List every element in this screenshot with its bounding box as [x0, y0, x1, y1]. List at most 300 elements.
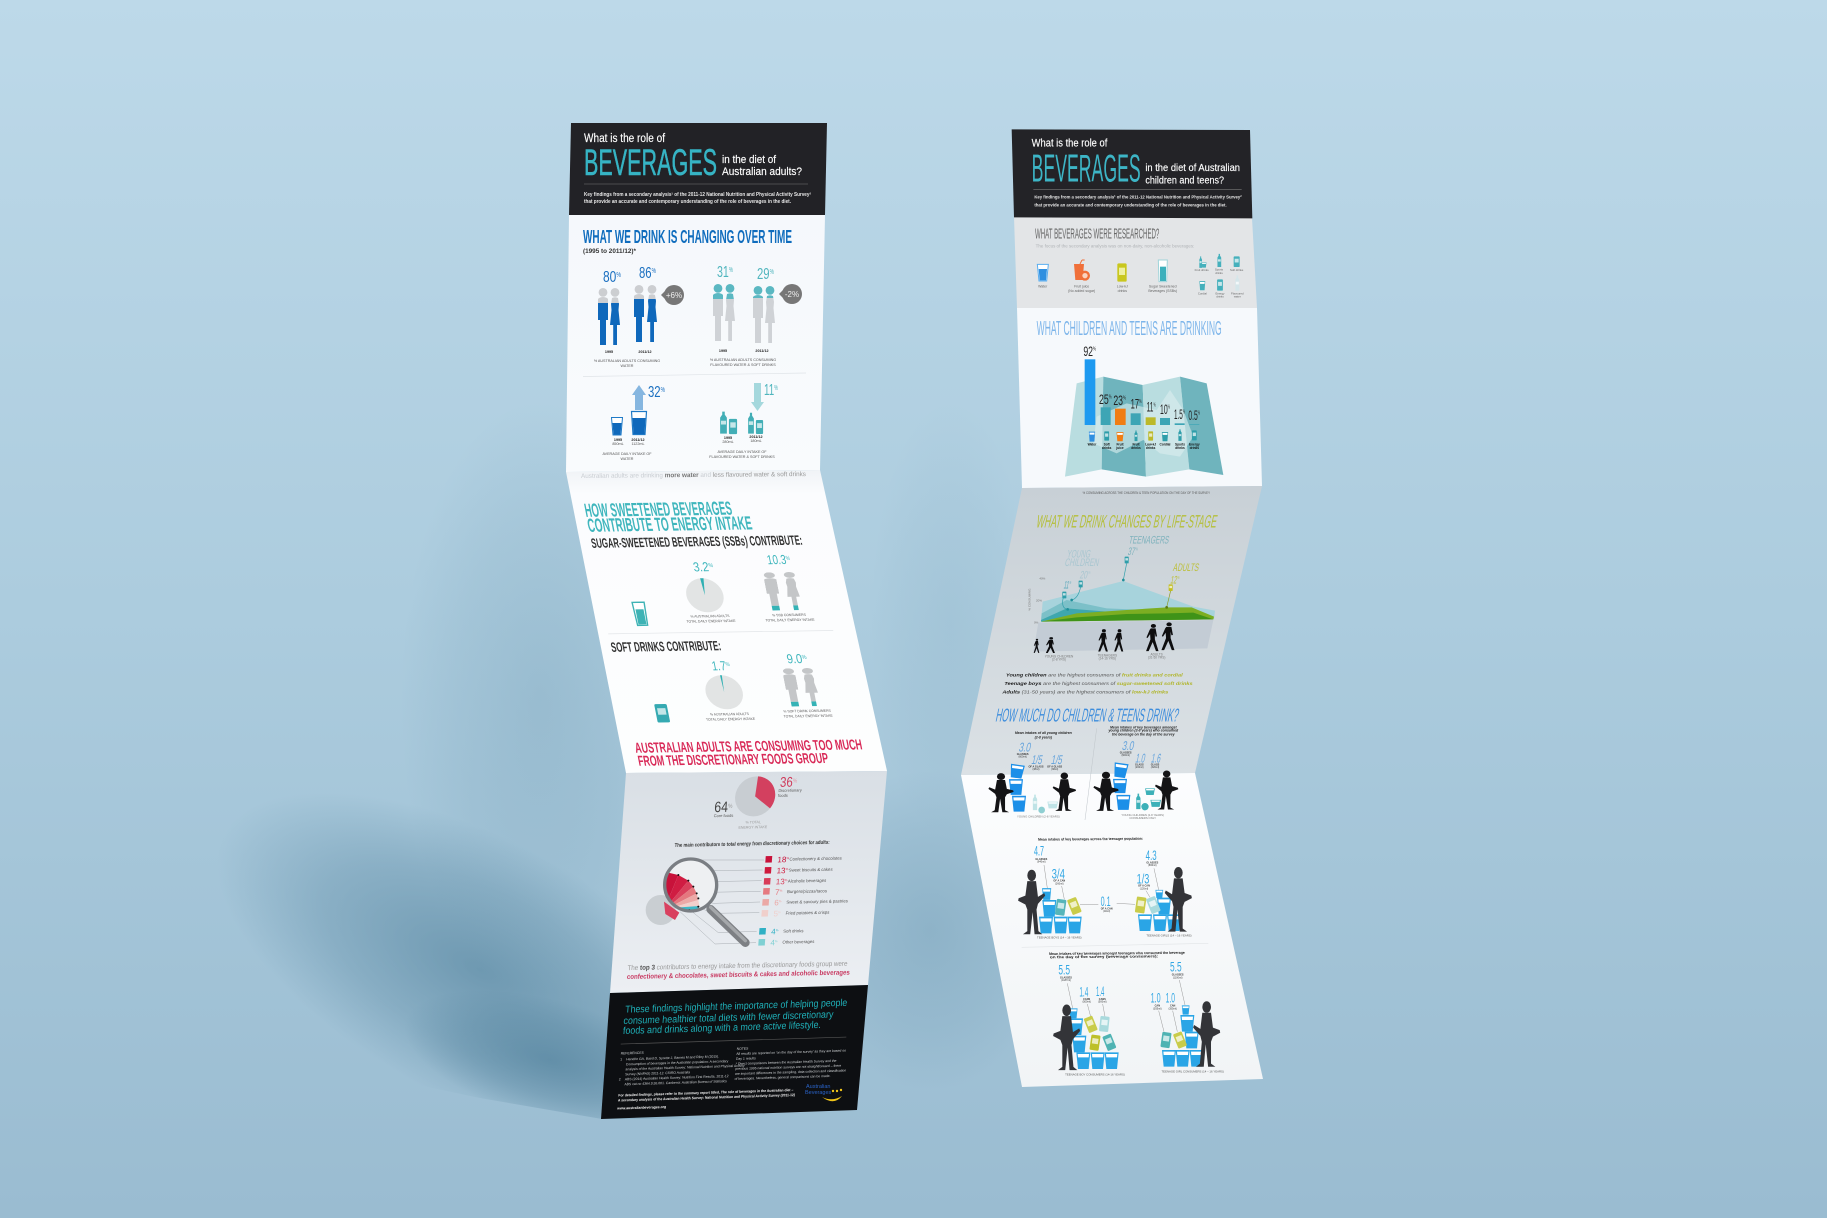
life stage labels: (14-16 YRS) — [1099, 657, 1116, 661]
silhouette: teen boy — [1018, 870, 1045, 934]
key message: consume healthier total diets with fewer discretionary — [623, 1010, 834, 1027]
footnote: % CONSUMING ACROSS THE CHILDREN & TEEN POPULATION ON THE DAY OF THE SURVEY — [1083, 491, 1211, 495]
values: teen population: 4.3 — [1146, 847, 1157, 863]
bar labels: Cordial — [1160, 443, 1171, 447]
chart labels lower: AVERAGE DAILY INTAKE OF — [602, 452, 652, 456]
bar labels: Water — [1088, 443, 1097, 447]
arrow: drinks down — [751, 383, 764, 411]
people: water 2011/12 — [634, 285, 657, 344]
bar labels — [1088, 443, 1200, 450]
pie label — [685, 614, 737, 624]
callout: minus 2 percent — [779, 284, 802, 304]
section: sweetened beverages — [582, 498, 866, 770]
chart labels lower: 2011/12 — [631, 438, 645, 442]
value labels: teen consumers: (1187ml) — [1061, 979, 1071, 982]
stat: 9.0 percent: 9.0 — [785, 651, 806, 666]
intro text — [584, 192, 811, 205]
panel: researched band — [1014, 217, 1257, 308]
icon: bottle and can 2011/12 — [748, 413, 763, 434]
stack: teen boy consumers — [1069, 1008, 1119, 1069]
callout: young children: YOUNG — [1066, 548, 1092, 560]
bar chart: beverages consumed: 10 — [1160, 401, 1176, 417]
value labels: young children: (38ml) — [1051, 768, 1058, 771]
pie label: TOTAL DAILY ENERGY INTAKE — [706, 717, 756, 722]
bar chart: beverages consumed: 92 — [1083, 343, 1099, 359]
bar labels: juice — [1115, 446, 1124, 450]
map of Australia — [1065, 377, 1223, 477]
intro text: that provide an accurate and contemporary understanding of the role of beverages in the diet. — [584, 199, 792, 205]
icon labels: Water — [1038, 284, 1048, 288]
values: teen population: 3/4 — [1052, 865, 1065, 881]
chart labels lower: WATER — [621, 457, 634, 461]
chart labels lower — [602, 435, 775, 461]
section title: WHAT WE DRINK IS CHANGING OVER TIME — [583, 227, 792, 247]
chart labels upper: WATER — [621, 364, 634, 368]
legend rows: % — [785, 878, 788, 882]
detailed findings note — [616, 1088, 796, 1111]
panel: children brochure — [961, 129, 1263, 1087]
icon: fruit juice — [1074, 260, 1090, 281]
bar chart: beverages consumed: % — [1198, 411, 1200, 417]
icon labels: Energy — [1216, 291, 1225, 295]
people label — [764, 613, 816, 622]
values: teen population: 4.7 — [1034, 843, 1044, 859]
icon labels: Fruit juice — [1074, 285, 1089, 289]
values: young children: 1/5 — [1030, 752, 1044, 767]
callout: young children: % — [1069, 580, 1072, 585]
value labels: teen consumers: (355ml) — [1153, 1007, 1162, 1010]
pie label: % AUSTRALIAN ADULTS — [710, 712, 750, 717]
logo: Australian Beverages: Australian — [806, 1084, 830, 1090]
panel: adults lower sheet — [610, 771, 887, 993]
values: teen consumers — [1058, 959, 1182, 1006]
chart labels lower: FLAVOURED WATER & SOFT DRINKS — [709, 455, 775, 459]
legend rows: 6 — [774, 898, 779, 907]
section subtitle: (1995 to 2011/12)* — [583, 248, 636, 255]
life stage labels: ADULTS — [1151, 652, 1163, 656]
takeaway text: confectionery & chocolates, sweet biscuits & cakes and alcoholic beverages — [627, 970, 850, 981]
stat: 64 percent: 64 — [714, 799, 732, 816]
callout: young children — [1063, 548, 1100, 591]
chart labels lower: 1122mL — [631, 442, 645, 446]
takeaway text — [627, 961, 851, 981]
logo: Australian Beverages — [805, 1084, 842, 1101]
value labels: teen population: OF A CAN — [1101, 907, 1113, 910]
people label: % SOFT DRINK CONSUMERS — [783, 709, 832, 713]
chart labels upper: % AUSTRALIAN ADULTS CONSUMING — [594, 359, 660, 363]
value labels: teen population: (120ml) — [1140, 887, 1148, 890]
value labels: young children: OF A GLASS — [1028, 765, 1044, 768]
references: Survey (NNPAS) 2011-12. CSIRO Australia — [625, 1070, 690, 1076]
value labels: teen consumers: CANS — [1083, 998, 1091, 1001]
panel: children header and upper content: WHAT BEVERAGES WERE RESEARCHED? — [1035, 226, 1159, 242]
icon labels: Sugar Sweetened — [1149, 285, 1177, 289]
section title: CONTRIBUTE TO ENERGY INTAKE — [586, 514, 754, 537]
group labels: young children: YOUNG CHILDREN (2-8 YEARS) — [1017, 815, 1060, 819]
key message — [622, 998, 848, 1037]
group labels: young children: YOUNG CHILDREN (2-8 YEARS) — [1121, 813, 1164, 817]
panel: children white map sheet — [1017, 308, 1262, 488]
stack: teen boys — [1039, 888, 1082, 933]
chart labels upper: 2011/12 — [638, 350, 652, 354]
stat: 86 percent: % — [652, 268, 656, 275]
references: ABS cat no 4364.0.55.001. Canberra: Australian Bureau of Statistics — [624, 1079, 727, 1086]
callout: adults: % — [1177, 575, 1180, 580]
people label: TOTAL DAILY ENERGY INTAKE — [783, 714, 834, 718]
label: total energy: ENERGY INTAKE — [738, 825, 768, 830]
icon labels: Fruit drinks — [1195, 268, 1209, 272]
callout: adults: 12 — [1169, 574, 1184, 586]
stat: 32 percent: 32 — [648, 384, 666, 401]
callout: plus 6 percent — [661, 285, 684, 305]
group labels: young children — [1017, 813, 1164, 820]
panel: children intake sheet — [961, 773, 1263, 1087]
value labels: teen population: (260ml) — [1055, 882, 1064, 885]
life stage findings: Young children are the highest consumers of fruit drinks and cordial — [1006, 673, 1183, 679]
heading line three: Australian adults? — [722, 166, 802, 178]
value labels: young children: (38ml) — [1032, 768, 1040, 771]
value labels: teen consumers: (355ml) — [1168, 1007, 1177, 1010]
bar labels: drinks — [1146, 446, 1156, 450]
icon: low kJ can — [1117, 263, 1127, 282]
value labels: teen population: OF A CAN — [1138, 885, 1150, 888]
takeaway text: The top 3 contributors to energy intake from the discretionary foods group were — [627, 961, 848, 972]
value labels: young children: GLASSES — [1017, 753, 1029, 756]
intro text: Key findings from a secondary analysis¹ of the 2011-12 National Nutrition and Physical Activity Survey² — [1034, 195, 1242, 201]
discretionary heading: FROM THE DISCRETIONARY FOODS GROUP — [637, 751, 830, 770]
bar chart: beverages consumed: 25 — [1099, 391, 1115, 407]
captions: young children: (2-8 years) — [1035, 735, 1053, 739]
bar chart: beverages consumed: 17 — [1131, 395, 1146, 411]
value labels: teen consumers: CAN — [1155, 1005, 1160, 1008]
value labels: teen consumers: CANS — [1099, 998, 1106, 1001]
panel: adults header — [569, 123, 827, 215]
caption: teen consumers: on the day of the survey (beverage consumers): — [1049, 954, 1159, 959]
stat: 36 percent: % — [793, 779, 798, 785]
life stage labels: TEENAGERS — [1098, 654, 1117, 658]
legend rows: 5 — [773, 909, 778, 918]
section: discretionary foods — [627, 772, 864, 981]
silhouettes: life stages — [1034, 622, 1174, 653]
callout: teenagers: % — [1135, 547, 1138, 552]
panel: adults upper sheet — [566, 215, 825, 472]
pie: 1.7 percent — [702, 675, 746, 710]
icon labels: Sports — [1215, 268, 1224, 272]
legend rows: Soft drinks — [783, 928, 804, 934]
legend rows: Fried potatoes & crisps — [785, 910, 830, 916]
bar labels: drinks — [1175, 446, 1185, 450]
value labels: teen population — [1035, 858, 1159, 913]
references: Hendrie GA, Baird D, Syrette J, Barnes M and Riley M (2015). — [626, 1054, 719, 1061]
legend rows: % — [776, 928, 779, 932]
stat: 1.7 percent: 1.7 — [710, 658, 731, 673]
legend rows — [758, 854, 851, 948]
icon: soft drink can — [654, 704, 670, 723]
bar chart: beverages consumed — [1083, 343, 1200, 425]
life stage labels — [1045, 652, 1165, 661]
legend rows: % — [786, 867, 789, 871]
values: young children: 1/5 — [1050, 752, 1064, 767]
value labels: young children: (320ml) — [1151, 766, 1159, 769]
values: young children — [1018, 738, 1163, 767]
bar chart: beverages consumed: 0.5 — [1188, 407, 1208, 423]
people: soft drinks 1995 — [713, 284, 735, 344]
pie label: TOTAL DAILY ENERGY INTAKE — [686, 619, 737, 624]
heading beverages: BEVERAGES — [584, 142, 717, 183]
chart labels upper: % AUSTRALIAN ADULTS CONSUMING — [710, 358, 776, 362]
section: teenagers intake — [1018, 837, 1224, 1076]
values: teen population — [1034, 843, 1157, 909]
chart labels lower: 1995 — [724, 436, 732, 440]
bar chart: beverages consumed: % — [1139, 399, 1142, 405]
value labels: teen consumers: (500ml) — [1082, 1001, 1091, 1004]
notes: Day 1 results — [736, 1056, 756, 1061]
area chart: life stage: 40% — [1039, 576, 1046, 580]
stat: 10.3 percent: % — [785, 556, 791, 562]
value labels: young children: (600ml) — [1018, 755, 1027, 758]
icon labels: Beverages (SSBs) — [1148, 289, 1177, 293]
captions: young children — [1015, 725, 1179, 739]
captions: young children: young children (2-8 years) who consumed — [1107, 729, 1179, 733]
life stage labels: (2-8 YRS) — [1052, 657, 1066, 661]
icon labels: drinks — [1118, 289, 1127, 293]
icon labels — [1038, 268, 1244, 299]
value labels: young children: (600ml) — [1121, 754, 1130, 757]
label: total energy: % TOTAL — [745, 820, 761, 825]
caption: teen consumers: Mean intakes of key beverages amongst teenagers who consumed the beverage — [1049, 951, 1185, 956]
group labels: TEENAGE GIRL CONSUMERS (14 – 16 YEARS) — [1161, 1070, 1224, 1074]
bar chart: beverages consumed: 23 — [1113, 392, 1129, 408]
panel: children life-stage sheet — [961, 486, 1262, 775]
label: total energy — [738, 820, 768, 830]
stat: 1.7 percent: % — [725, 662, 731, 668]
stat: 32 percent: % — [661, 387, 665, 394]
legend rows: 18 — [777, 855, 787, 864]
value labels: teen consumers: GLASSES — [1172, 974, 1184, 977]
chart labels upper: 1995 — [719, 349, 727, 353]
callout: adults — [1169, 562, 1200, 586]
intro text: that provide an accurate and contemporary understanding of the role of beverages in the diet. — [1034, 203, 1227, 209]
notes: of beverages. Nevertheless, general comparisons can be made. — [734, 1074, 831, 1081]
callout: young children: 11 — [1063, 579, 1077, 591]
legend rows: % — [786, 856, 790, 860]
stat: 29 percent: % — [770, 269, 774, 276]
notes: All results are reported on 'on the day of the survey' as they are based on — [736, 1049, 846, 1056]
values: young children: 3.0 — [1018, 740, 1033, 755]
area chart: life stage: 20% — [1036, 598, 1042, 602]
silhouette: teen girl — [1165, 867, 1192, 932]
value labels: teen consumers: (500ml) — [1098, 1001, 1107, 1004]
captions: young children: Mean intakes of all young children — [1015, 731, 1072, 735]
stack: teen girls — [1135, 890, 1181, 931]
chart labels lower: 850mL — [612, 442, 624, 446]
stat: 80 percent: 80 — [603, 269, 621, 286]
references: REFERENCES — [621, 1051, 645, 1056]
bar chart: beverages consumed: 1.5 — [1174, 406, 1193, 422]
bar chart: beverages consumed: % — [1123, 396, 1126, 402]
section: what we drink is changing — [581, 227, 807, 480]
panel: children brochure: WHAT CHILDREN AND TEENS ARE DRINKING — [1037, 317, 1222, 340]
bar labels: Fruit — [1132, 443, 1140, 447]
legend rows: Sweet biscuits & cakes — [789, 867, 833, 873]
callout: teenagers: 37 — [1127, 546, 1141, 558]
references — [618, 1048, 746, 1087]
references: 1 — [620, 1057, 622, 1062]
legend rows: Sweet & savoury pies & pastries — [786, 898, 848, 905]
bar labels: Low-kJ — [1145, 443, 1156, 447]
chart labels lower: 180mL — [750, 439, 762, 443]
value labels: young children: GLASS — [1135, 763, 1144, 766]
legend rows: 7 — [775, 888, 780, 897]
silhouettes: young children — [988, 770, 1178, 812]
icon labels: Flavoured — [1231, 291, 1244, 295]
people: water 1995 — [598, 288, 620, 348]
value labels: teen population: GLASSES — [1035, 858, 1048, 861]
silhouette: teen girl consumer — [1193, 1001, 1220, 1067]
stat: 11 percent: % — [774, 385, 778, 392]
chart labels lower: AVERAGE DAILY INTAKE OF — [717, 450, 767, 454]
value labels: teen population: (860ml) — [1148, 864, 1157, 867]
icon labels: drinks — [1215, 271, 1223, 275]
icon labels: (No added sugar) — [1068, 289, 1095, 293]
heading line two: in the diet of Australian — [1145, 163, 1240, 174]
value labels: teen consumers: CAN — [1170, 1005, 1176, 1008]
notes — [734, 1043, 848, 1081]
values: teen consumers: 5.5 — [1058, 961, 1070, 977]
legend rows: Alcoholic beverages — [788, 878, 826, 884]
notes: are important differences in the sampling, data collection and classification — [735, 1068, 847, 1076]
detailed findings note: A secondary analysis of the Australian Health Survey: National Nutrition and Physical Activity Survey (2011-12) — [618, 1093, 796, 1103]
value labels: teen population: OF A CAN — [1053, 880, 1065, 883]
group labels — [1037, 934, 1192, 940]
chart labels upper: 2011/12 — [755, 349, 769, 353]
panel: adults footer — [601, 985, 868, 1119]
group labels: young children: CONSUMERS ONLY — [1129, 816, 1156, 820]
label: core foods: Core foods — [714, 813, 733, 818]
value labels: teen consumers: GLASSES — [1060, 976, 1072, 979]
stat: 80 percent: % — [616, 272, 621, 279]
value labels: teen consumers — [1060, 974, 1184, 1010]
section: life stage and intake for children — [988, 491, 1219, 820]
subheading soft drinks: SOFT DRINKS CONTRIBUTE: — [609, 638, 722, 655]
values: teen consumers: 1.0 — [1151, 990, 1161, 1006]
legend rows: 4 — [770, 938, 775, 947]
logo: Australian Beverages: Beverages — [805, 1090, 832, 1096]
chart labels lower: 280mL — [722, 440, 734, 444]
bar labels: drinks — [1131, 446, 1141, 450]
value labels: young children — [1017, 751, 1160, 771]
people: soft drink consumers — [783, 668, 818, 706]
value labels: teen population: GLASSES — [1146, 861, 1159, 864]
references: Consumption of beverages in the Australian population: A secondary — [626, 1059, 729, 1066]
section title: HOW SWEETENED BEVERAGES — [583, 499, 734, 522]
value labels: young children: GLASSES — [1120, 751, 1132, 754]
values: young children: 3.0 — [1121, 738, 1136, 753]
notes: NOTES — [737, 1047, 749, 1051]
stat: 64 percent: % — [728, 804, 733, 810]
legend rows: 4 — [771, 927, 776, 936]
header block — [1012, 129, 1252, 218]
group labels: TEENAGE BOY CONSUMERS (14-16 YEARS) — [1065, 1072, 1125, 1076]
people label — [782, 709, 834, 718]
stat: 3.2 percent: 3.2 — [692, 559, 713, 574]
values: young children: 1.6 — [1150, 751, 1163, 766]
silhouette: teen boy consumer — [1053, 1005, 1080, 1070]
caption: teen consumers — [1049, 951, 1185, 959]
legend rows: % — [778, 910, 781, 914]
life stage findings: Teenage boys are the highest consumers of sugar-sweetened soft drinks — [1004, 681, 1193, 687]
value labels: young children: (200ml) — [1135, 766, 1144, 769]
stack: teen girl consumers — [1160, 1005, 1204, 1067]
value labels: teen population: (40ml) — [1103, 910, 1110, 913]
people label: % SSB CONSUMERS — [772, 613, 807, 617]
life stage labels: (31-50 YRS) — [1148, 656, 1165, 660]
discretionary heading — [634, 738, 866, 770]
legend rows: Other beverages — [782, 939, 815, 945]
values: teen population: 0.1 — [1101, 893, 1111, 909]
magnifying glass chart — [646, 859, 764, 944]
bar labels: Energy — [1189, 443, 1200, 447]
group labels: TEENAGE BOYS (14 – 16 YEARS) — [1037, 936, 1082, 940]
subheading SSBs: SUGAR-SWEETENED BEVERAGES (SSBs) CONTRIBUTE: — [590, 533, 804, 551]
stat: 3.2 percent: % — [708, 563, 714, 569]
panel: adults middle sheet — [566, 470, 887, 773]
callout: young children: 20 — [1079, 569, 1093, 581]
value labels: young children: OF A GLASS — [1047, 765, 1063, 768]
people label: TOTAL DAILY ENERGY INTAKE — [765, 618, 816, 622]
life stage findings: Adults (31-50 years) are the highest consumers of low-kJ drinks — [1001, 689, 1169, 695]
callout: teenagers: TEENAGERS — [1128, 534, 1170, 546]
heading line three: children and teens? — [1145, 175, 1224, 186]
bar icons — [1089, 429, 1197, 442]
stat: 31 percent: % — [729, 267, 733, 274]
stat: 11 percent: 11 — [764, 382, 781, 399]
legend rows: Confectionery & chocolates — [789, 856, 842, 862]
bar chart: beverages consumed: % — [1183, 410, 1185, 416]
icon: water — [1037, 264, 1048, 281]
callout: young children: CHILDREN — [1064, 557, 1100, 569]
captions: young children: Mean intakes of key beverages amongst — [1110, 725, 1177, 729]
bar chart: beverages consumed: 11 — [1147, 399, 1161, 415]
notes: previous 1995 national nutrition surveys are not straightforward – there — [735, 1064, 841, 1071]
value labels: teen consumers: (1100ml) — [1173, 977, 1183, 980]
bar labels: Soft — [1104, 443, 1111, 447]
callout: young children: % — [1088, 570, 1091, 575]
pie: energy intake — [734, 776, 777, 817]
callout: plus 6 percent: +6% — [666, 291, 682, 300]
stat: 31 percent: 31 — [717, 264, 735, 281]
chart labels upper: FLAVOURED WATER & SOFT DRINKS — [710, 363, 776, 367]
people: soft drinks 2011/12 — [753, 286, 775, 343]
legend rows: 13 — [776, 866, 786, 875]
chart title: The main contributors to total energy from discretionary choices for adults: — [674, 840, 830, 849]
section title — [583, 499, 754, 537]
values: teen consumers: 1.4 — [1079, 984, 1088, 1000]
values: young children: 1.0 — [1134, 751, 1147, 766]
bar chart: beverages consumed: % — [1093, 347, 1096, 353]
header block: BEVERAGES — [1032, 148, 1141, 191]
intro text — [1034, 195, 1242, 209]
icon labels: drinks — [1216, 295, 1224, 299]
area chart: life stage — [1028, 557, 1215, 652]
legend rows: Burgers/pizzas/tacos — [787, 888, 827, 894]
section subtitle: The focus of the secondary analysis was on non-dairy, non-alcoholic beverages: — [1036, 243, 1194, 249]
stat: 86 percent: 86 — [639, 265, 657, 282]
bar labels: drinks — [1190, 446, 1199, 450]
caption: teen population: Mean intakes of key beverages across the teenager population: — [1038, 837, 1144, 842]
heading line two: in the diet of — [722, 154, 777, 166]
values: teen population: 1/3 — [1137, 870, 1149, 886]
